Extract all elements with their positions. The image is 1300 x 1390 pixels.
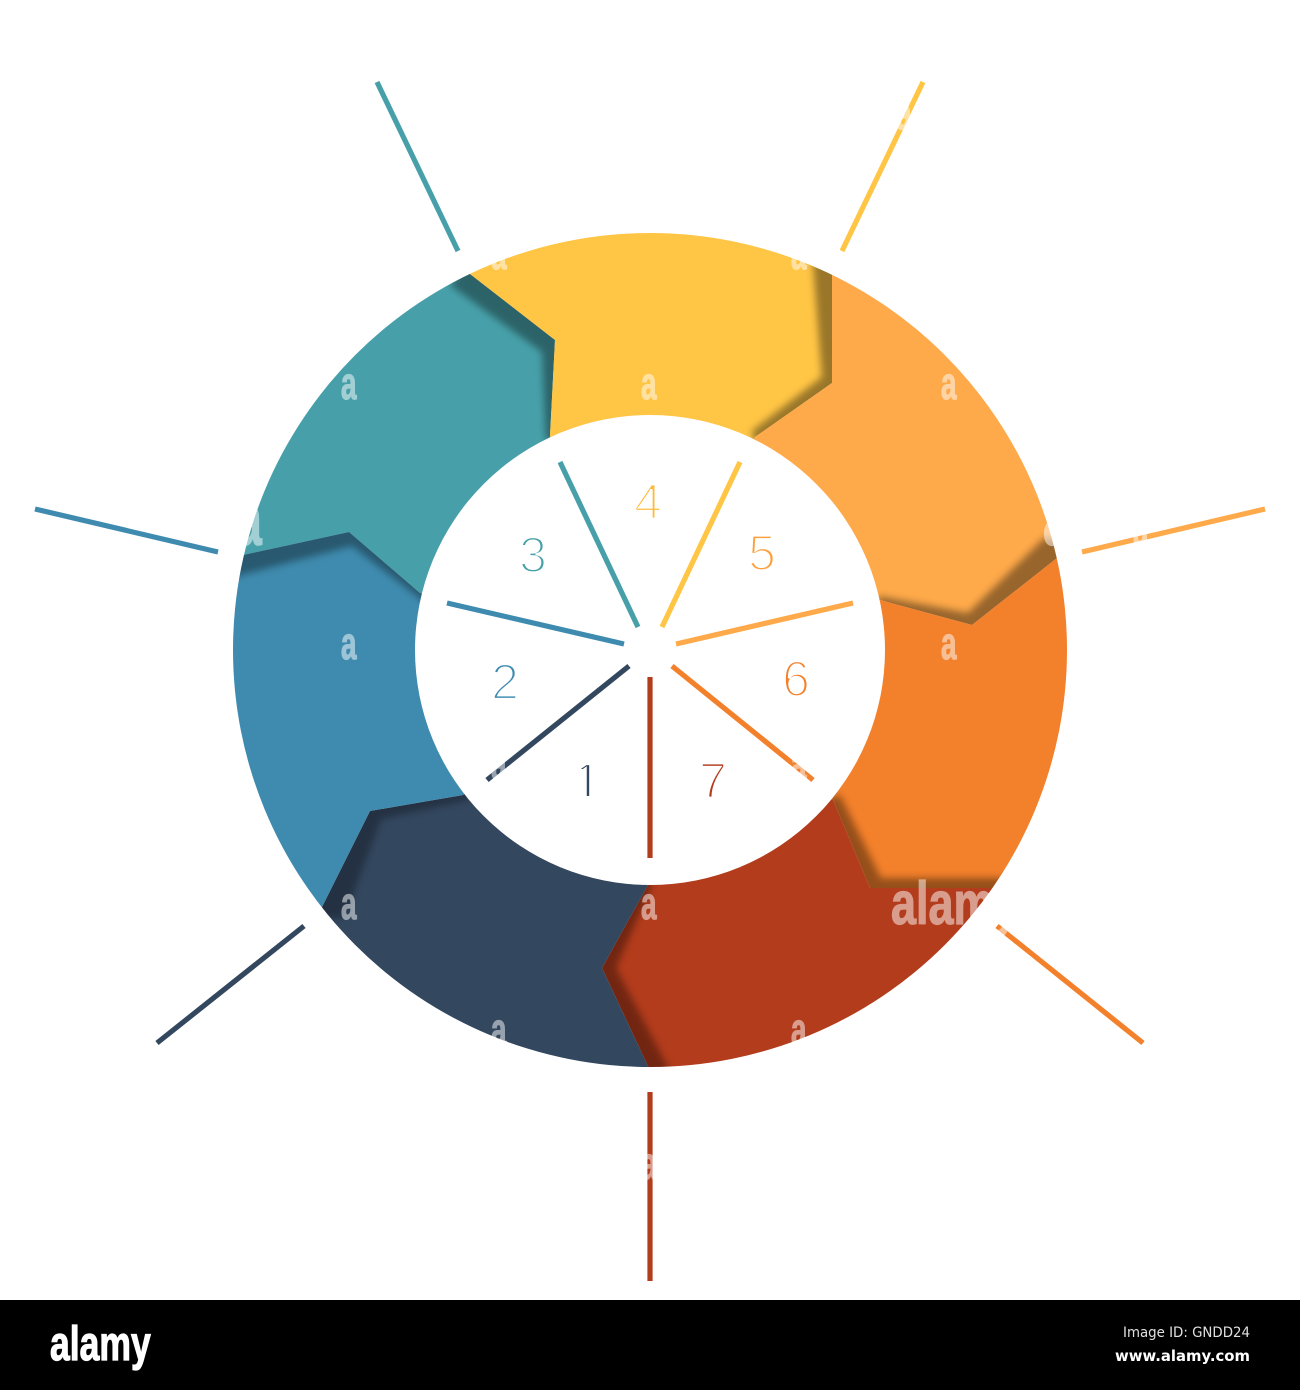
step numbers: 4 <box>634 474 662 530</box>
watermark: a <box>641 878 657 929</box>
watermark: a <box>896 88 912 139</box>
segment 1: navy <box>322 794 648 1067</box>
watermark: a <box>791 228 807 279</box>
footer logo: alamy <box>50 1317 151 1370</box>
ring chart: seven arrow segments <box>233 233 1067 1067</box>
watermark: a <box>791 1004 807 1055</box>
watermark: a <box>641 358 657 409</box>
image id: Image ID: GNDD24 <box>1123 1325 1250 1341</box>
step numbers: 5 <box>748 525 776 581</box>
step numbers: 2 <box>491 654 519 710</box>
watermark: a <box>1133 504 1149 555</box>
step numbers: 7 <box>699 753 727 809</box>
inner spokes <box>447 462 853 858</box>
watermark: a <box>491 228 507 279</box>
segment 6: orange <box>832 558 1067 888</box>
segment 3: teal <box>244 274 555 594</box>
step numbers: 3 <box>519 527 547 583</box>
watermark: a <box>491 1004 507 1055</box>
watermark: a <box>791 738 807 789</box>
watermark: a <box>341 618 357 669</box>
segment 7: red <box>602 799 992 1067</box>
segment 5: light orange <box>754 274 1057 625</box>
segment 4: yellow <box>470 233 832 440</box>
inner white circle <box>415 415 885 885</box>
watermark: a <box>236 479 263 562</box>
watermark: a <box>491 738 507 789</box>
watermark: a <box>1043 479 1070 562</box>
watermark <box>236 88 1149 1189</box>
footer bar <box>0 1300 1300 1390</box>
step numbers: 6 <box>782 651 810 707</box>
watermark: a <box>641 1138 657 1189</box>
watermark: a <box>941 358 957 409</box>
segment 2: blue <box>233 532 464 908</box>
watermark: a <box>941 618 957 669</box>
watermark: alamy <box>891 871 1019 938</box>
watermark: a <box>341 358 357 409</box>
step numbers <box>491 474 810 813</box>
website: www.alamy.com <box>1115 1347 1250 1365</box>
watermark: a <box>341 878 357 929</box>
step numbers: 1 <box>572 753 602 813</box>
